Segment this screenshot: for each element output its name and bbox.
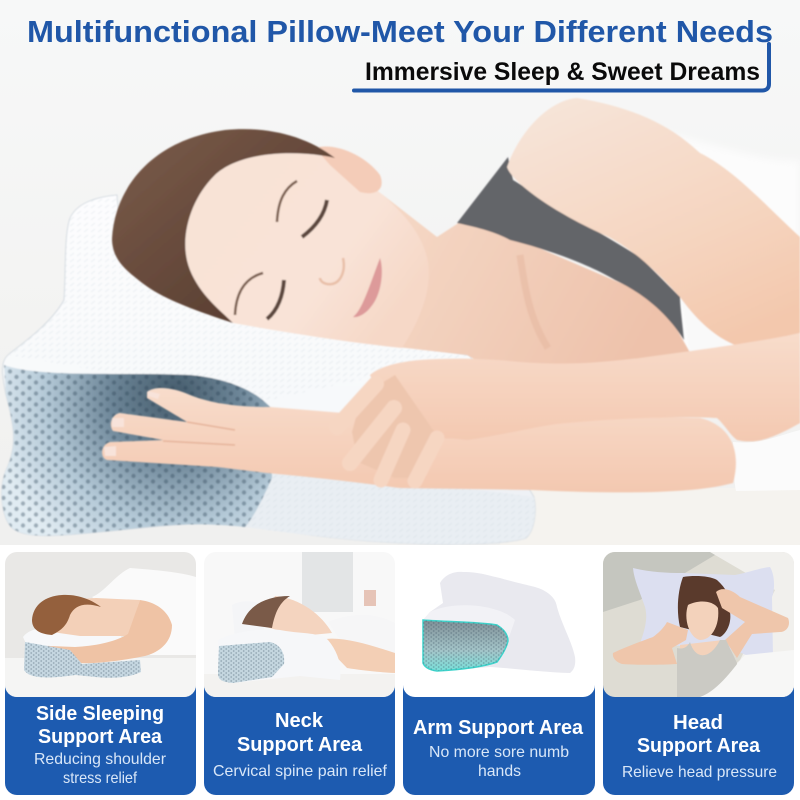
left arm and hand xyxy=(613,622,688,665)
upper arm xyxy=(507,98,800,347)
neck and chest xyxy=(380,195,692,365)
hair xyxy=(678,576,730,637)
mesh side panel xyxy=(218,642,284,683)
bed surface xyxy=(204,674,395,697)
heading: Neck xyxy=(275,710,324,732)
sofa background xyxy=(603,552,794,697)
right arm and hand xyxy=(716,589,789,658)
chest crease xyxy=(520,255,548,348)
contour pillow body xyxy=(218,629,340,683)
butterfly pillow xyxy=(633,567,774,658)
tank top xyxy=(677,640,737,697)
grey tank top xyxy=(457,157,684,340)
description line two: stress relief xyxy=(63,770,138,787)
heading line two: Support Area xyxy=(237,734,363,756)
pillow body xyxy=(2,195,535,544)
description: Cervical spine pain relief xyxy=(213,763,388,780)
title: Multifunctional Pillow-Meet Your Different Needs xyxy=(27,14,773,49)
woman xyxy=(102,98,800,492)
pillow knit texture xyxy=(22,200,458,356)
upper eyebrow xyxy=(277,181,297,222)
lips xyxy=(353,258,382,317)
panel: arm support xyxy=(403,552,595,795)
lower eyebrow xyxy=(235,273,263,315)
subtitle text: Immersive Sleep & Sweet Dreams xyxy=(365,58,760,86)
heading: Head xyxy=(673,712,723,734)
description: Relieve head pressure xyxy=(622,764,777,781)
pillow top xyxy=(23,628,125,655)
hair xyxy=(242,596,290,628)
white shirt and bedding xyxy=(92,568,196,655)
white bedding xyxy=(700,552,794,697)
panel: head support xyxy=(603,552,794,795)
face xyxy=(262,596,332,636)
lower hand nails xyxy=(104,391,160,456)
pillow product image xyxy=(403,552,595,697)
side knit texture xyxy=(245,470,535,544)
pillow back wing xyxy=(232,601,265,640)
palm backing between fingers xyxy=(352,376,425,468)
wall xyxy=(5,552,196,697)
description line two: hands xyxy=(478,763,521,780)
heading line two: Support Area xyxy=(637,735,761,757)
head support photo xyxy=(603,552,794,697)
bedsheet behind shoulder xyxy=(681,219,794,347)
mesh texture xyxy=(218,642,284,683)
face and shoulders xyxy=(680,602,735,660)
bracket line xyxy=(354,44,769,90)
sheet gap under arm xyxy=(682,298,745,356)
side knit panel xyxy=(247,526,316,536)
finger three xyxy=(381,430,403,480)
blue caption card xyxy=(5,670,196,795)
white pillow at right xyxy=(733,430,800,491)
pillow front lobe highlight xyxy=(423,605,515,640)
blue caption card xyxy=(603,670,794,795)
lower hand and forearm xyxy=(102,388,736,492)
finger four xyxy=(415,438,437,481)
mesh texture xyxy=(24,642,141,678)
upper eyelashes xyxy=(302,200,327,237)
face xyxy=(185,153,429,348)
plant pot xyxy=(364,590,376,606)
finger two xyxy=(350,408,394,463)
pillow body xyxy=(423,572,575,673)
woman's face and chest xyxy=(52,598,140,636)
mesh texture xyxy=(423,620,508,671)
neck support photo xyxy=(204,552,395,697)
room background xyxy=(0,0,800,545)
neck and arm xyxy=(320,639,395,673)
contour pillow xyxy=(2,195,535,544)
arm and hand xyxy=(41,600,172,663)
white bed surface xyxy=(500,488,800,545)
heading: Side Sleeping xyxy=(36,703,164,725)
heading line two: Support Area xyxy=(38,726,163,748)
wall xyxy=(204,552,395,697)
upper sofa xyxy=(603,552,720,612)
white background xyxy=(403,552,595,697)
finger one xyxy=(337,384,376,427)
blue caption card xyxy=(204,670,395,795)
bed surface xyxy=(5,658,196,697)
hero photo: woman sleeping on contour pillow xyxy=(0,0,800,545)
grey column xyxy=(302,552,353,612)
subtitle with corner bracket xyxy=(354,44,769,90)
upper hand fingers xyxy=(337,384,437,481)
upper forearm xyxy=(370,333,800,445)
heading: Arm Support Area xyxy=(413,717,584,739)
highlighted mesh area xyxy=(423,620,508,671)
panel: neck support xyxy=(204,552,395,795)
hair xyxy=(32,595,101,635)
description: No more sore numb xyxy=(429,744,569,761)
panel: side sleeping support xyxy=(5,552,196,795)
mesh pillow xyxy=(24,642,141,678)
lower hand finger creases xyxy=(163,422,235,445)
lower eyelashes xyxy=(267,280,284,319)
blue mesh side panel xyxy=(2,365,272,536)
blue caption card xyxy=(403,670,595,795)
side sleeping photo xyxy=(5,552,196,697)
ear xyxy=(315,147,382,193)
nose shading xyxy=(320,258,344,284)
shirt xyxy=(328,615,395,655)
hair xyxy=(112,129,335,323)
mesh dot pattern xyxy=(2,365,272,536)
description: Reducing shoulder xyxy=(34,751,167,768)
blanket xyxy=(700,650,794,697)
